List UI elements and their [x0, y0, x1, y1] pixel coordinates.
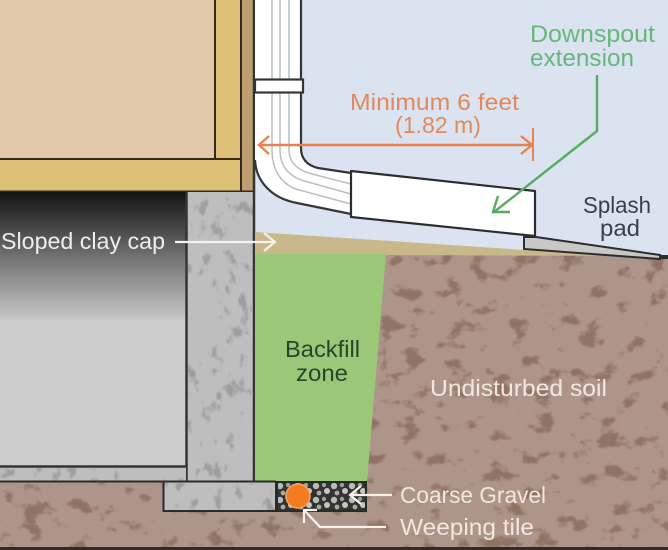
label: pad: pad [600, 215, 640, 241]
label: coarse gravel: Coarse Gravel [400, 482, 546, 508]
label: 1.82 m: (1.82 m) [395, 112, 481, 138]
label: extension: extension [530, 45, 634, 72]
panel: floor slab [0, 466, 186, 481]
downspout extension [351, 171, 535, 236]
arrow: downspout extension pointer [493, 75, 597, 212]
label: backfill: Backfill [285, 336, 360, 362]
label: weeping tile: Weeping tile [400, 514, 534, 540]
icon: weeping tile pipe [286, 484, 310, 508]
bottom border line [0, 547, 668, 550]
label: sloped clay cap: Sloped clay cap [1, 228, 165, 254]
arrow: minimum distance dimension [259, 128, 533, 161]
panel: coarse gravel [277, 482, 366, 511]
arrow: weeping tile pointer [304, 510, 386, 527]
splash pad [524, 237, 668, 259]
label: undisturbed soil: Undisturbed soil [430, 375, 607, 401]
label: zone: zone [296, 360, 348, 386]
label: splash: Splash [583, 192, 651, 218]
downspout [255, 0, 351, 214]
arrow: clay cap pointer [175, 233, 275, 251]
label: minimum 6 feet: Minimum 6 feet [350, 89, 520, 115]
panel: interior wall and floor framing [0, 0, 254, 192]
panel: basement interior [0, 192, 186, 467]
panel: backfill zone [255, 254, 386, 482]
panel: concrete foundation wall [186, 0, 254, 481]
label: downspout: Downspout [530, 21, 655, 48]
arrow: coarse gravel pointer [350, 486, 392, 504]
basement shadow gradient [0, 192, 186, 320]
panel: sloped clay cap [255, 232, 660, 256]
panel: footing [0, 482, 276, 511]
panel: undisturbed soil [0, 255, 668, 548]
